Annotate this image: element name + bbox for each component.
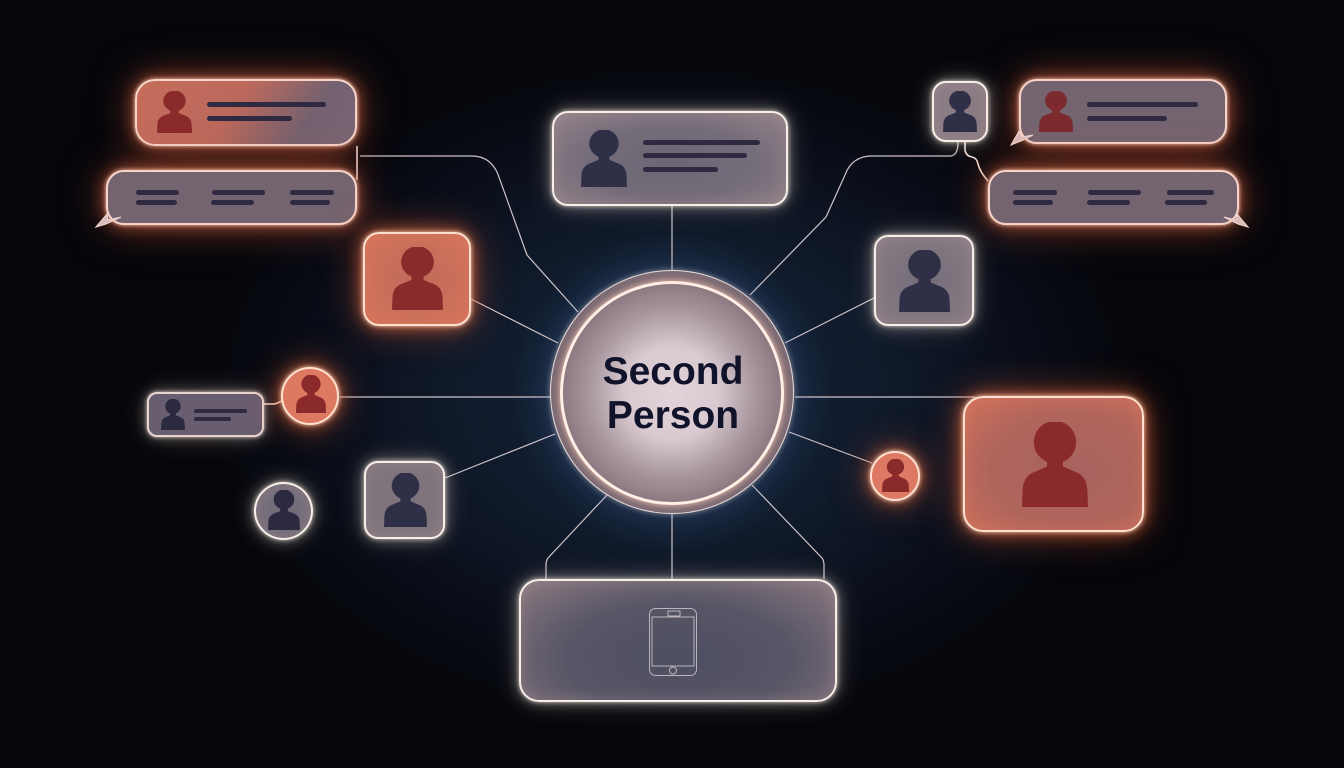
hub label (603, 350, 743, 437)
panel: grey square avatar lower left (364, 461, 445, 539)
panel: grey square avatar right (874, 235, 974, 326)
panel: right message bubble (988, 170, 1239, 225)
panel: bottom device card (519, 579, 837, 702)
icon: person (157, 91, 192, 133)
icon: person (296, 375, 326, 413)
bubble tail right (1224, 214, 1250, 228)
bubble tail top right (1010, 130, 1034, 146)
panel: large red avatar right (963, 396, 1144, 532)
icon: person (384, 473, 427, 527)
panel: small square avatar top right (932, 81, 988, 142)
icon: smartphone (649, 608, 697, 676)
text line (1087, 116, 1167, 121)
text line (207, 102, 326, 107)
hub inner disc (560, 281, 784, 505)
central hub (550, 270, 794, 514)
panel: grey circle avatar lower left (254, 482, 313, 540)
text line (194, 409, 247, 413)
text column 3 (290, 190, 334, 205)
text column 1 (1013, 190, 1057, 205)
icon: person (161, 399, 185, 430)
text column 2 (1087, 190, 1141, 205)
icon: person (899, 250, 950, 312)
text line (194, 417, 231, 421)
panel: top-left profile card (135, 79, 357, 146)
icon: person (943, 91, 977, 132)
icon: person (268, 490, 300, 530)
icon: person (1039, 91, 1073, 132)
text line (643, 167, 718, 172)
text line (643, 140, 760, 145)
hub label: Second (603, 350, 743, 393)
text column 3 (1165, 190, 1214, 205)
icon: person (1022, 422, 1088, 507)
text column 1 (136, 190, 179, 205)
text line (643, 153, 747, 158)
panel: small left profile card (147, 392, 264, 437)
text line (1087, 102, 1198, 107)
icon: person (882, 459, 909, 492)
icon: person (392, 247, 443, 310)
panel: top-left message bubble (106, 170, 357, 225)
panel: top-right profile bubble (1019, 79, 1227, 144)
text line (207, 116, 292, 121)
hub label: Person (607, 394, 739, 437)
panel: red square avatar upper left (363, 232, 471, 326)
bubble tail left (94, 213, 122, 228)
panel: small red circle avatar right (870, 451, 920, 501)
icon: person (581, 130, 627, 187)
panel: red circle avatar left (281, 367, 339, 425)
panel: top center profile card (552, 111, 788, 206)
text column 2 (211, 190, 265, 205)
